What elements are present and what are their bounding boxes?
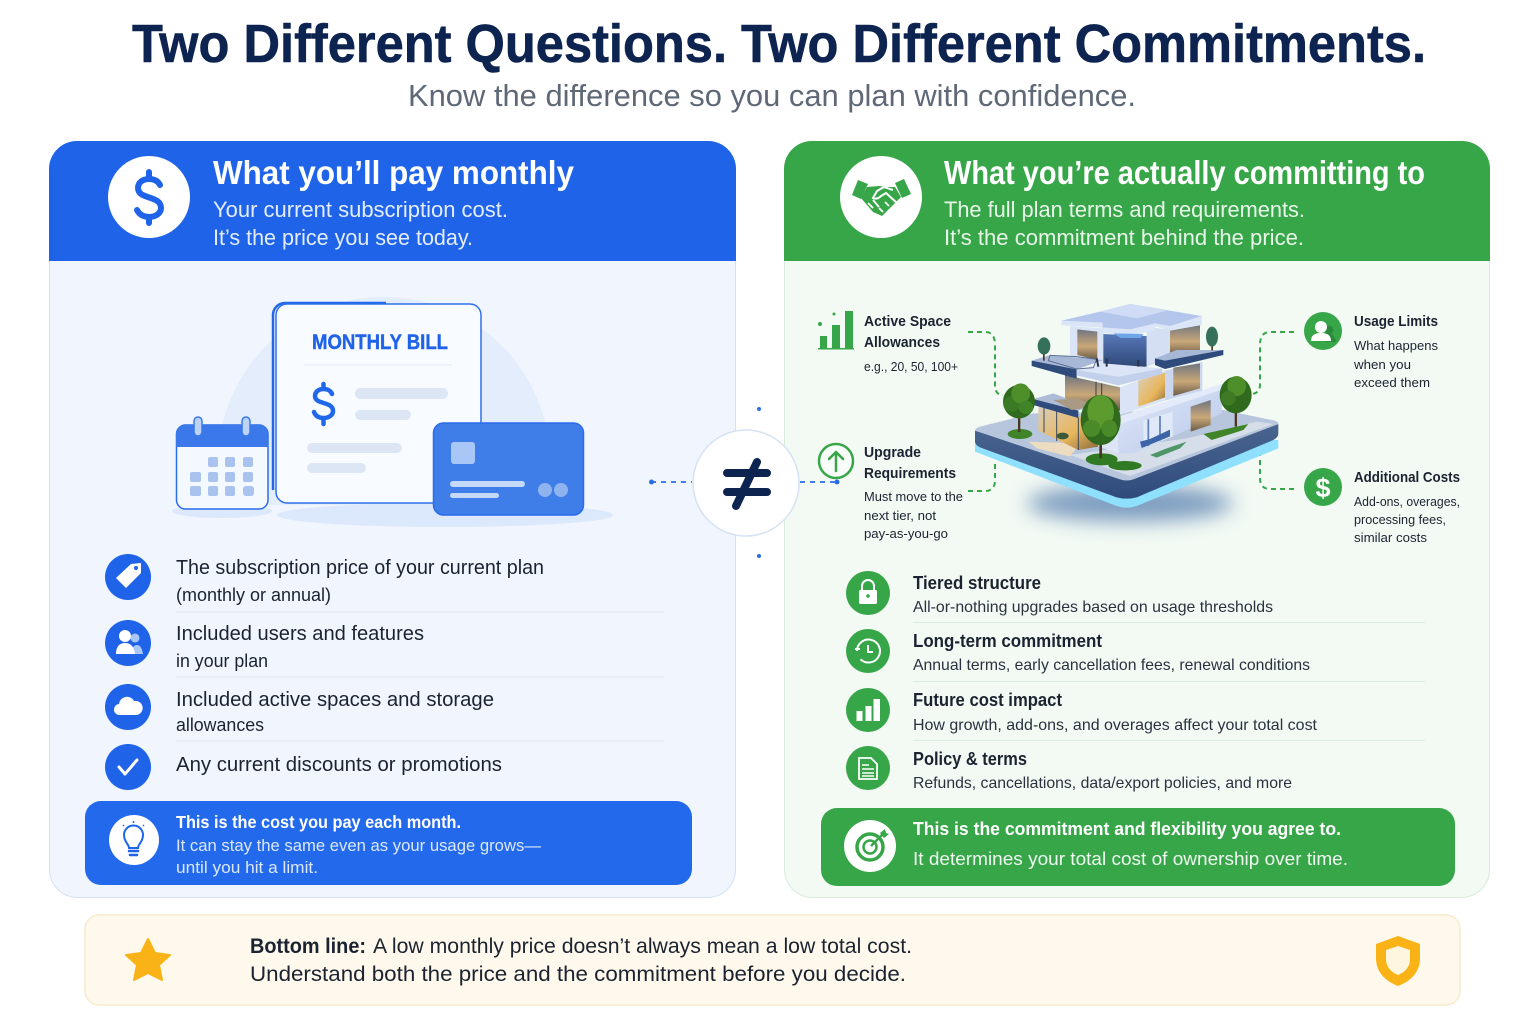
list: what the monthly price covers: [105, 554, 664, 790]
callout: additional costs: Add-ons, overages,: [1354, 494, 1460, 509]
callout: upgrade requirements: Must move to the: [864, 489, 963, 504]
callout: commitment and flexibility: This is the commitment and flexibility you agree to.: [913, 819, 1341, 839]
connector: usage limits: [1252, 332, 1294, 394]
callout: active space allowances: e.g., 20, 50, 100+: [864, 359, 958, 374]
callout: upgrade requirements: next tier, not: [864, 508, 936, 523]
panel description: [944, 197, 1305, 250]
panel description: The full plan terms and requirements.: [944, 197, 1305, 222]
panel description: It’s the price you see today.: [213, 225, 473, 250]
callout: active space allowances: [818, 311, 958, 374]
item: long-term commitment: [846, 629, 1310, 674]
ground floor: [1033, 383, 1225, 453]
icon: shield: [1376, 936, 1420, 986]
illustration: floating modern building: [975, 304, 1278, 522]
panel: what you'll pay monthly: [49, 141, 736, 898]
callout: cost each month: This is the cost you pay each month.: [176, 812, 461, 832]
calendar: [176, 417, 268, 509]
bottom line text: A low monthly price doesn’t always mean a low total cost.: [373, 935, 912, 958]
credit card: [434, 423, 584, 515]
callout: commitment and flexibility: [821, 808, 1455, 886]
icon: target: [844, 820, 896, 872]
callout: commitment and flexibility: It determines your total cost of ownership over time.: [913, 849, 1348, 869]
panel header: monthly: [49, 141, 736, 261]
item: tiered structure: Tiered structure: [913, 573, 1041, 593]
callout: cost each month: until you hit a limit.: [176, 858, 318, 877]
item: discounts: Any current discounts or promotions: [176, 754, 502, 776]
roof: [1062, 304, 1202, 338]
callout: usage limits: What happens: [1354, 338, 1438, 353]
item: subscription price: (monthly or annual): [176, 584, 331, 605]
item: long-term commitment: Long-term commitment: [913, 631, 1102, 651]
trees and planting: [1003, 327, 1252, 470]
callout: upgrade requirements: Upgrade: [864, 444, 921, 461]
panel description: [213, 197, 508, 250]
bottom line text: [250, 935, 912, 986]
panel header: commitment: [784, 141, 1490, 261]
callout: upgrade requirements: [819, 444, 963, 541]
item: users and features: [105, 620, 424, 671]
callout: upgrade requirements: Requirements: [864, 465, 956, 482]
connector: active space allowances: [968, 332, 1003, 395]
callout: upgrade requirements: pay-as-you-go: [864, 526, 948, 541]
middle floor: [1053, 362, 1202, 415]
callout: additional costs: Additional Costs: [1354, 469, 1460, 486]
panel description: It’s the commitment behind the price.: [944, 225, 1304, 250]
bottom line text: Understand both the price and the commitment before you decide.: [250, 963, 906, 986]
panel: what you're actually committing to: [784, 141, 1490, 898]
callout: additional costs: similar costs: [1354, 530, 1428, 545]
item: tiered structure: All-or-nothing upgrades based on usage thresholds: [913, 599, 1273, 616]
callout: usage limits: exceed them: [1354, 375, 1430, 390]
item: future cost impact: Future cost impact: [913, 690, 1062, 710]
icon: star: [126, 939, 170, 980]
icon: bar chart: [818, 311, 854, 350]
item: subscription price: The subscription price of your current plan: [176, 557, 544, 579]
callout: cost each month: It can stay the same even as your usage grows—: [176, 836, 541, 855]
callout: usage limits: [1304, 312, 1438, 390]
item: policy and terms: [846, 746, 1292, 792]
item: users and features: Included users and features: [176, 623, 424, 645]
icon: dollar: [1304, 468, 1342, 506]
item: long-term commitment: Annual terms, early cancellation fees, renewal conditions: [913, 657, 1310, 674]
connector: additional costs: [1260, 455, 1294, 489]
item: tiered structure: [846, 571, 1273, 616]
callout: active space allowances: Active Space: [864, 313, 951, 330]
callout: cost each month: [85, 801, 692, 885]
list: commitment details: [846, 571, 1425, 792]
item: spaces and storage: Included active spaces and storage: [176, 689, 494, 711]
icon: dollar in circle: [108, 156, 190, 238]
bill document: MONTHLY BILL: [312, 331, 448, 354]
item: discounts: [105, 744, 502, 790]
callout: usage limits: when you: [1353, 357, 1411, 372]
item: subscription price: [105, 554, 544, 605]
panel heading: What you’ll pay monthly: [213, 154, 575, 191]
item: policy and terms: Refunds, cancellations, data/export policies, and more: [913, 775, 1292, 792]
subtitle: Know the difference so you can plan with confidence.: [408, 78, 1136, 113]
panel heading: What you’re actually committing to: [944, 154, 1425, 191]
bottom line banner: [85, 915, 1460, 1005]
item: policy and terms: Policy & terms: [913, 749, 1027, 769]
icon: handshake in circle: [840, 156, 922, 238]
not-equal connector: [649, 407, 840, 558]
item: spaces and storage: allowances: [176, 714, 264, 735]
callout: usage limits: Usage Limits: [1354, 313, 1438, 330]
panel description: Your current subscription cost.: [213, 197, 508, 222]
icon: up arrow: [819, 444, 853, 478]
bottom line text: Bottom line:: [250, 935, 366, 958]
callout: additional costs: [1304, 468, 1460, 545]
callout: active space allowances: Allowances: [864, 334, 940, 351]
item: future cost impact: How growth, add-ons, and overages affect your total cost: [913, 717, 1318, 734]
connector: upgrade requirements: [968, 460, 995, 491]
item: future cost impact: [846, 688, 1318, 734]
illustration: monthly bill, calendar and credit card: [172, 297, 613, 527]
top floor: [1032, 324, 1223, 385]
bill document: [273, 303, 481, 503]
callout: additional costs: processing fees,: [1354, 512, 1446, 527]
platform: [975, 410, 1278, 508]
item: users and features: in your plan: [176, 650, 268, 671]
icon: dollar: $: [1315, 473, 1331, 503]
item: spaces and storage: [105, 684, 494, 735]
icon: light bulb: [109, 815, 159, 865]
title: Two Different Questions. Two Different Commitments.: [132, 14, 1426, 74]
icon: users: [1304, 312, 1342, 350]
